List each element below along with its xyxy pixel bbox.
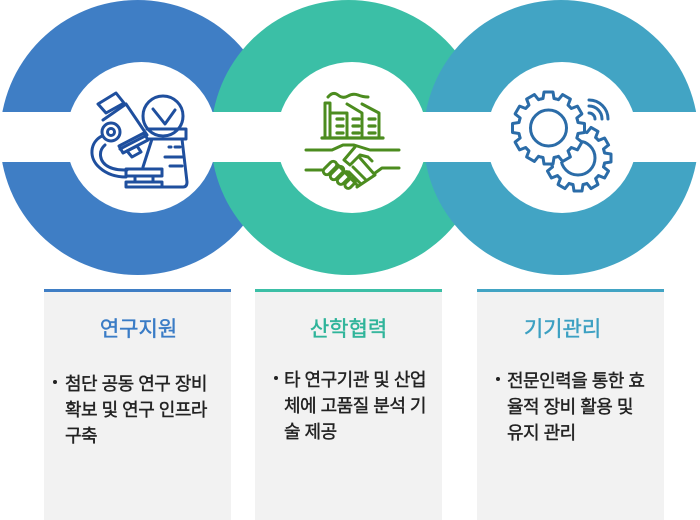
bullet text: 술 제공 <box>284 422 337 442</box>
bullet text <box>284 370 426 442</box>
white horizontal band <box>0 112 700 162</box>
ring: teal <box>424 0 698 275</box>
icon: microscope and flask <box>92 93 187 187</box>
icon: factory and handshake <box>306 93 399 190</box>
heading: 기기관리 <box>524 318 601 341</box>
bullet text: 구축 <box>65 426 97 446</box>
bullet text: 체에 고품질 분석 기 <box>284 396 426 416</box>
panel: 연구지원 <box>44 289 231 520</box>
ring: blue <box>0 0 275 275</box>
heading: 산학협력 <box>310 318 387 341</box>
panel: 기기관리 <box>477 289 664 520</box>
large gear <box>512 92 584 164</box>
bullet text: 타 연구기관 및 산업 <box>284 370 426 390</box>
bullet text <box>507 371 644 443</box>
bullet text: 첨단 공동 연구 장비 <box>65 374 207 394</box>
signal arcs <box>589 100 608 119</box>
bullet text <box>65 374 208 446</box>
bullet text: 율적 장비 활용 및 <box>507 397 633 417</box>
ring: green <box>211 0 486 275</box>
bullet text: 확보 및 연구 인프라 <box>65 400 207 420</box>
heading: 연구지원 <box>100 318 177 341</box>
bullet text: 유지 관리 <box>507 423 576 443</box>
icon: gears with signal <box>512 92 611 191</box>
panel: 산학협력 <box>255 289 442 520</box>
bullet text: 전문인력을 통한 효 <box>507 371 644 391</box>
small gear <box>545 125 611 191</box>
